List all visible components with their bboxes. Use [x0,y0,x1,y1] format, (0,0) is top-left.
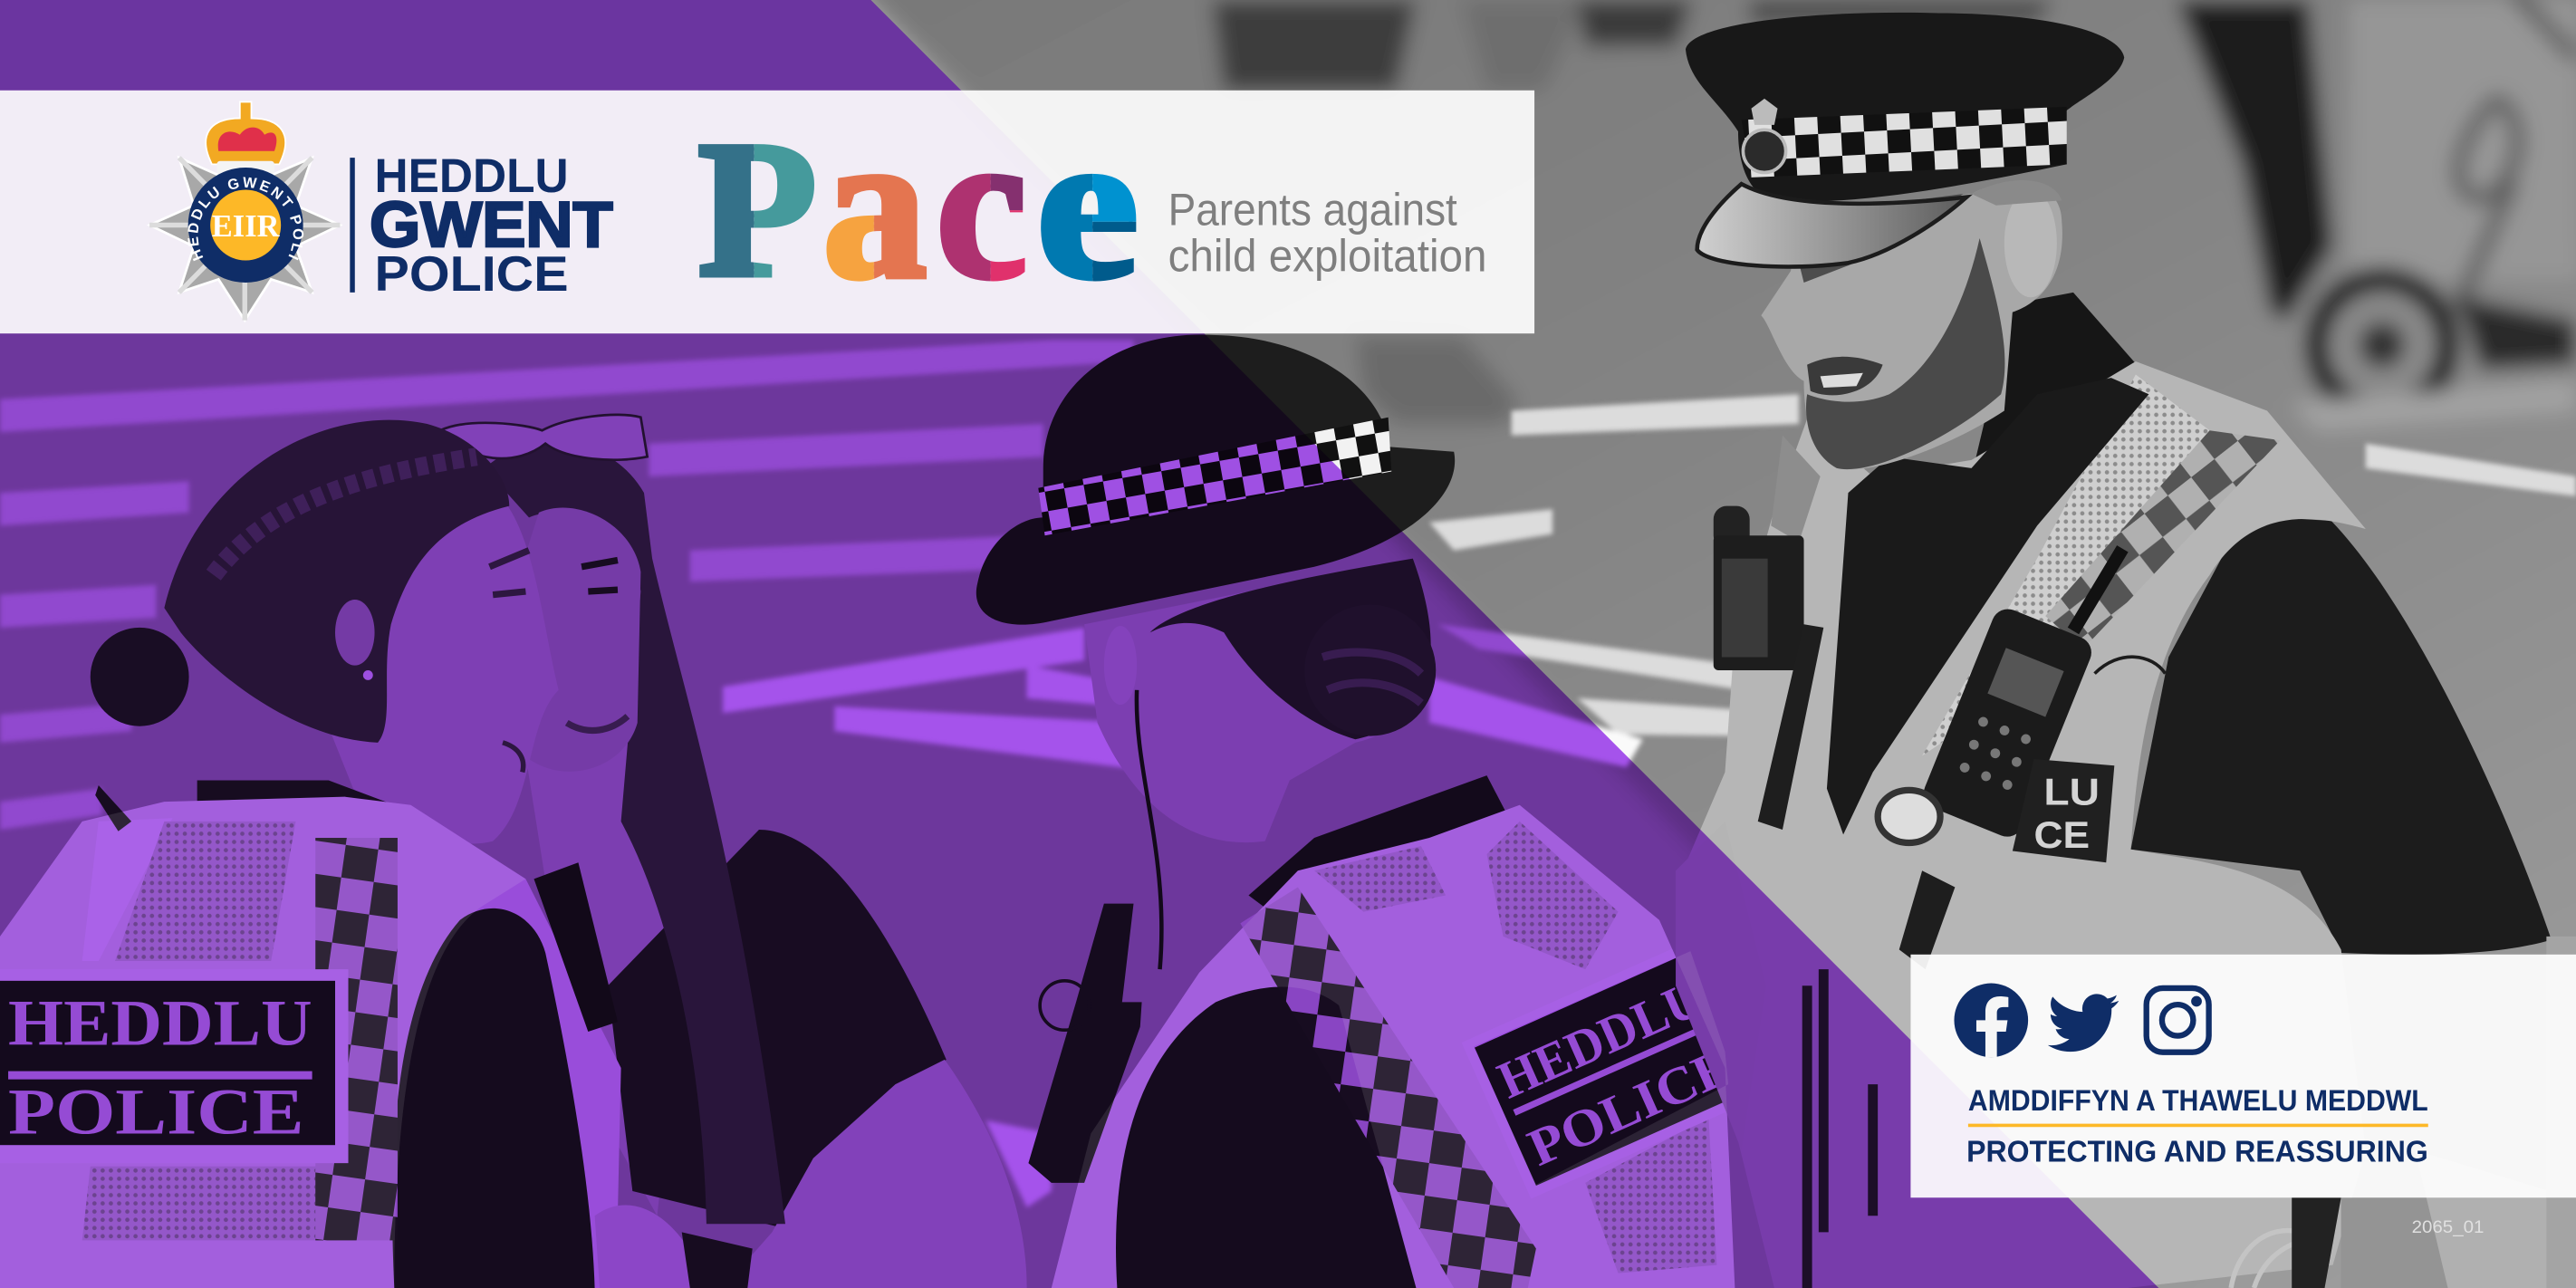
logo text: Heddlu Gwent Police: POLICE [375,246,569,302]
icon: facebook [1954,984,2028,1057]
person: woman with long hair [440,415,1027,1288]
panel: logo banner [0,90,1534,333]
chest patch: CE [2033,813,2090,856]
logo: Pace [698,90,1139,322]
logo: Pace: P [698,102,816,317]
panel: social and strapline [1910,955,2576,1197]
logo: Pace: c [937,90,1027,322]
strapline: Welsh: AMDDIFFYN A THAWELU MEDDWL [1968,1083,2428,1117]
photo background: road markings [0,340,2576,1207]
logo text: Heddlu Gwent Police: GWENT [370,188,613,260]
icon: instagram [2147,988,2209,1053]
strapline: English: PROTECTING AND REASSURING [1966,1135,2428,1168]
custodian helmet [976,334,1455,625]
person: centre officer from behind [976,334,1766,1288]
logo: Pace: e [1036,90,1139,322]
logo: Gwent Police crest: EIIR [212,209,281,244]
logo text: Heddlu Gwent Police [370,149,613,302]
reference code: 2065_01 [2412,1218,2484,1237]
vest lettering: HEDDLU: HEDDLU [8,986,312,1060]
tagline: child exploitation [1168,230,1486,281]
vest lettering: POLICE: POLICE [8,1075,304,1149]
logo: Gwent Police crest [147,101,342,322]
chest patch [2013,759,2114,862]
logo text: Heddlu Gwent Police: HEDDLU [375,149,569,203]
vest patch [1475,949,1723,1186]
chest patch: LU [2043,771,2100,813]
person: left officer [0,420,753,1288]
vest highlight: centre officer [1052,805,1735,1288]
tagline: Parents against [1168,184,1457,235]
peaked cap [1686,13,2124,267]
shoulder radio [1918,604,2096,841]
logo: Pace: a [823,90,927,322]
vest lettering: HEDDLU: HEDDLU [1489,968,1711,1110]
vest lettering: POLICE: POLICE [1519,1035,1741,1177]
body camera [1714,506,1804,670]
tagline [1168,184,1486,281]
sunglasses on head [440,415,648,460]
person: right officer [1676,13,2576,1288]
vest highlight: left officer [0,797,525,1288]
icon: twitter [2048,994,2119,1052]
purple top strip [0,0,963,92]
